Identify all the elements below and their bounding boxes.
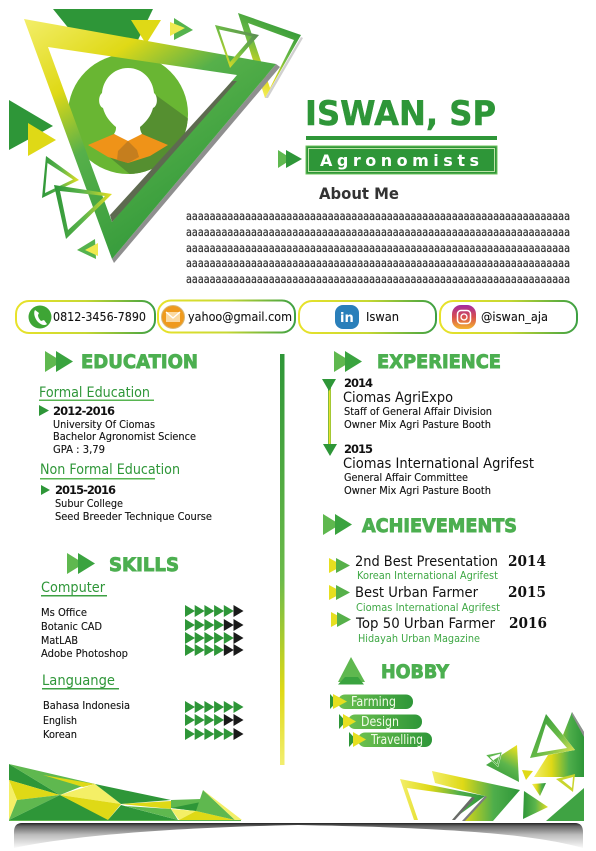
- left dark triangle: [9, 100, 53, 150]
- achievement 2014: Korean International Agrifest: [357, 569, 499, 582]
- experience 2014: Owner Mix Agri Pasture Booth: [344, 418, 491, 431]
- experience 2015: 2015: [344, 442, 373, 456]
- orange collar: [88, 134, 168, 163]
- achievement 2016: Top 50 Urban Farmer: [355, 616, 495, 632]
- hobby: travelling: Travelling: [370, 733, 423, 748]
- computer labels: Adobe Photoshop: [41, 647, 128, 660]
- corner triangle: [546, 788, 584, 821]
- formal heading: Formal Education: [39, 385, 150, 401]
- experience 2015: [343, 442, 534, 497]
- formal entry: 2012-2016: [53, 404, 115, 418]
- hobby heading: HOBBY: [381, 661, 449, 683]
- outlined triangle upper: [530, 714, 575, 758]
- grey edges: [462, 796, 487, 821]
- column divider: [280, 354, 284, 765]
- icon: instagram: [452, 305, 476, 329]
- left outlined triangle 1: [42, 156, 79, 198]
- language heading: Languange: [42, 673, 115, 689]
- hobby: farming: Farming: [351, 695, 396, 710]
- timeline: [322, 379, 337, 456]
- experience 2015: General Affair Committee: [344, 471, 468, 484]
- non formal entry: Subur College: [55, 497, 123, 510]
- contact: phone: 0812-3456-7890: [53, 309, 146, 324]
- bottom left polygon art: [9, 764, 242, 821]
- contact: instagram: [440, 301, 577, 333]
- contact: phone: [16, 301, 155, 333]
- language ratings: [185, 701, 244, 740]
- language labels: English: [43, 714, 77, 727]
- small green triangle: [532, 783, 546, 796]
- about heading: About Me: [319, 184, 399, 203]
- achievement 2015: [329, 583, 546, 614]
- skills arrows: [67, 553, 95, 574]
- name underline: [306, 136, 497, 140]
- computer labels: Ms Office: [41, 606, 87, 619]
- computer ratings: [185, 605, 244, 656]
- icon: linkedin: in: [340, 311, 354, 326]
- panel: hobby: [330, 657, 449, 748]
- hobby: design: Design: [361, 715, 399, 730]
- achievement 2014: 2nd Best Presentation: [355, 554, 498, 570]
- experience 2014: [343, 376, 492, 431]
- non formal entry: Seed Breeder Technique Course: [55, 510, 212, 523]
- formal entry: GPA : 3,79: [53, 443, 105, 456]
- formal entry: [39, 404, 196, 456]
- achievement 2016: 2016: [509, 614, 547, 632]
- experience 2014: Ciomas AgriExpo: [343, 390, 453, 406]
- large shape behind: [534, 712, 584, 777]
- small bottom arrow: [77, 239, 98, 259]
- education heading: EDUCATION: [81, 351, 198, 373]
- icon: phone: [28, 306, 52, 328]
- portrait shadow strip: [112, 64, 280, 263]
- bottom shadow: [14, 823, 583, 848]
- education arrows: [45, 351, 73, 372]
- contact: linkedin: [299, 301, 436, 333]
- portrait circle: [68, 54, 190, 176]
- panel: achievements: [323, 514, 547, 645]
- experience 2015: Ciomas International Agrifest: [343, 456, 534, 472]
- wing triangle: [486, 745, 519, 782]
- title arrows: [278, 150, 302, 168]
- achievement 2016: Hidayah Urban Magazine: [358, 632, 480, 645]
- achievements heading: ACHIEVEMENTS: [362, 515, 517, 537]
- language labels: [43, 699, 130, 741]
- experience arrows: [334, 351, 362, 372]
- small yellow triangle: [522, 770, 533, 780]
- skills heading: SKILLS: [109, 554, 179, 576]
- computer heading: Computer: [41, 580, 105, 596]
- small outlined triangle top: [215, 25, 259, 68]
- about text: [186, 209, 570, 286]
- computer labels: MatLAB: [41, 634, 78, 647]
- achievement 2015: Best Urban Farmer: [355, 585, 478, 601]
- formal entry: University Of Ciomas: [53, 418, 155, 431]
- achievement 2016: [331, 612, 547, 645]
- center triangle: [523, 791, 548, 819]
- non formal entry: [41, 483, 212, 523]
- contact: email: yahoo@gmail.com: [188, 309, 292, 324]
- job title badge: Agronomists: [320, 151, 479, 170]
- panel: skills: [41, 553, 244, 741]
- large outlined triangle: [400, 779, 485, 820]
- large shape: [432, 771, 520, 821]
- non formal entry: 2015-2016: [55, 483, 116, 497]
- left outlined triangle 2: [54, 185, 112, 239]
- dark green top triangle: [53, 9, 153, 42]
- computer labels: Botanic CAD: [41, 620, 102, 633]
- job title badge: [306, 146, 497, 174]
- name: ISWAN, SP: [305, 94, 496, 134]
- formal entry: Bachelor Agronomist Science: [53, 430, 196, 443]
- contact: email: [158, 300, 295, 332]
- achievements arrows: [323, 514, 352, 535]
- small top arrow: [170, 18, 193, 40]
- contact: instagram: @iswan_aja: [481, 309, 548, 324]
- silhouette head: [99, 68, 157, 142]
- experience 2014: Staff of General Affair Division: [344, 405, 492, 418]
- achievement 2015: Ciomas International Agrifest: [356, 601, 501, 614]
- experience heading: EXPERIENCE: [377, 351, 501, 373]
- small outlined triangle: [486, 752, 502, 767]
- experience 2015: Owner Mix Agri Pasture Booth: [344, 484, 491, 497]
- achievement 2014: 2014: [508, 552, 546, 570]
- yellow top triangle: [131, 20, 161, 44]
- small outlined triangle right: [556, 774, 575, 792]
- inner frame shadow: [110, 81, 237, 222]
- language labels: Bahasa Indonesia: [43, 699, 130, 712]
- non formal heading: Non Formal Education: [40, 462, 180, 478]
- computer labels: [41, 606, 128, 660]
- icon: mail: [162, 306, 184, 328]
- panel: experience: [322, 351, 534, 497]
- bottom right triangle art: [400, 712, 584, 821]
- contact: linkedin: Iswan: [366, 309, 399, 324]
- icon: hobby tree: [338, 657, 365, 684]
- top right outlined triangle: [238, 13, 303, 98]
- left yellow triangle: [28, 123, 56, 156]
- language labels: Korean: [43, 728, 77, 741]
- header triangle artwork: [9, 9, 303, 263]
- grey edge: [572, 712, 584, 737]
- achievement 2014: [329, 552, 546, 582]
- experience 2014: 2014: [344, 376, 373, 390]
- panel: education: [39, 351, 212, 523]
- achievement 2015: 2015: [508, 583, 546, 601]
- large triangle frame: [24, 19, 276, 259]
